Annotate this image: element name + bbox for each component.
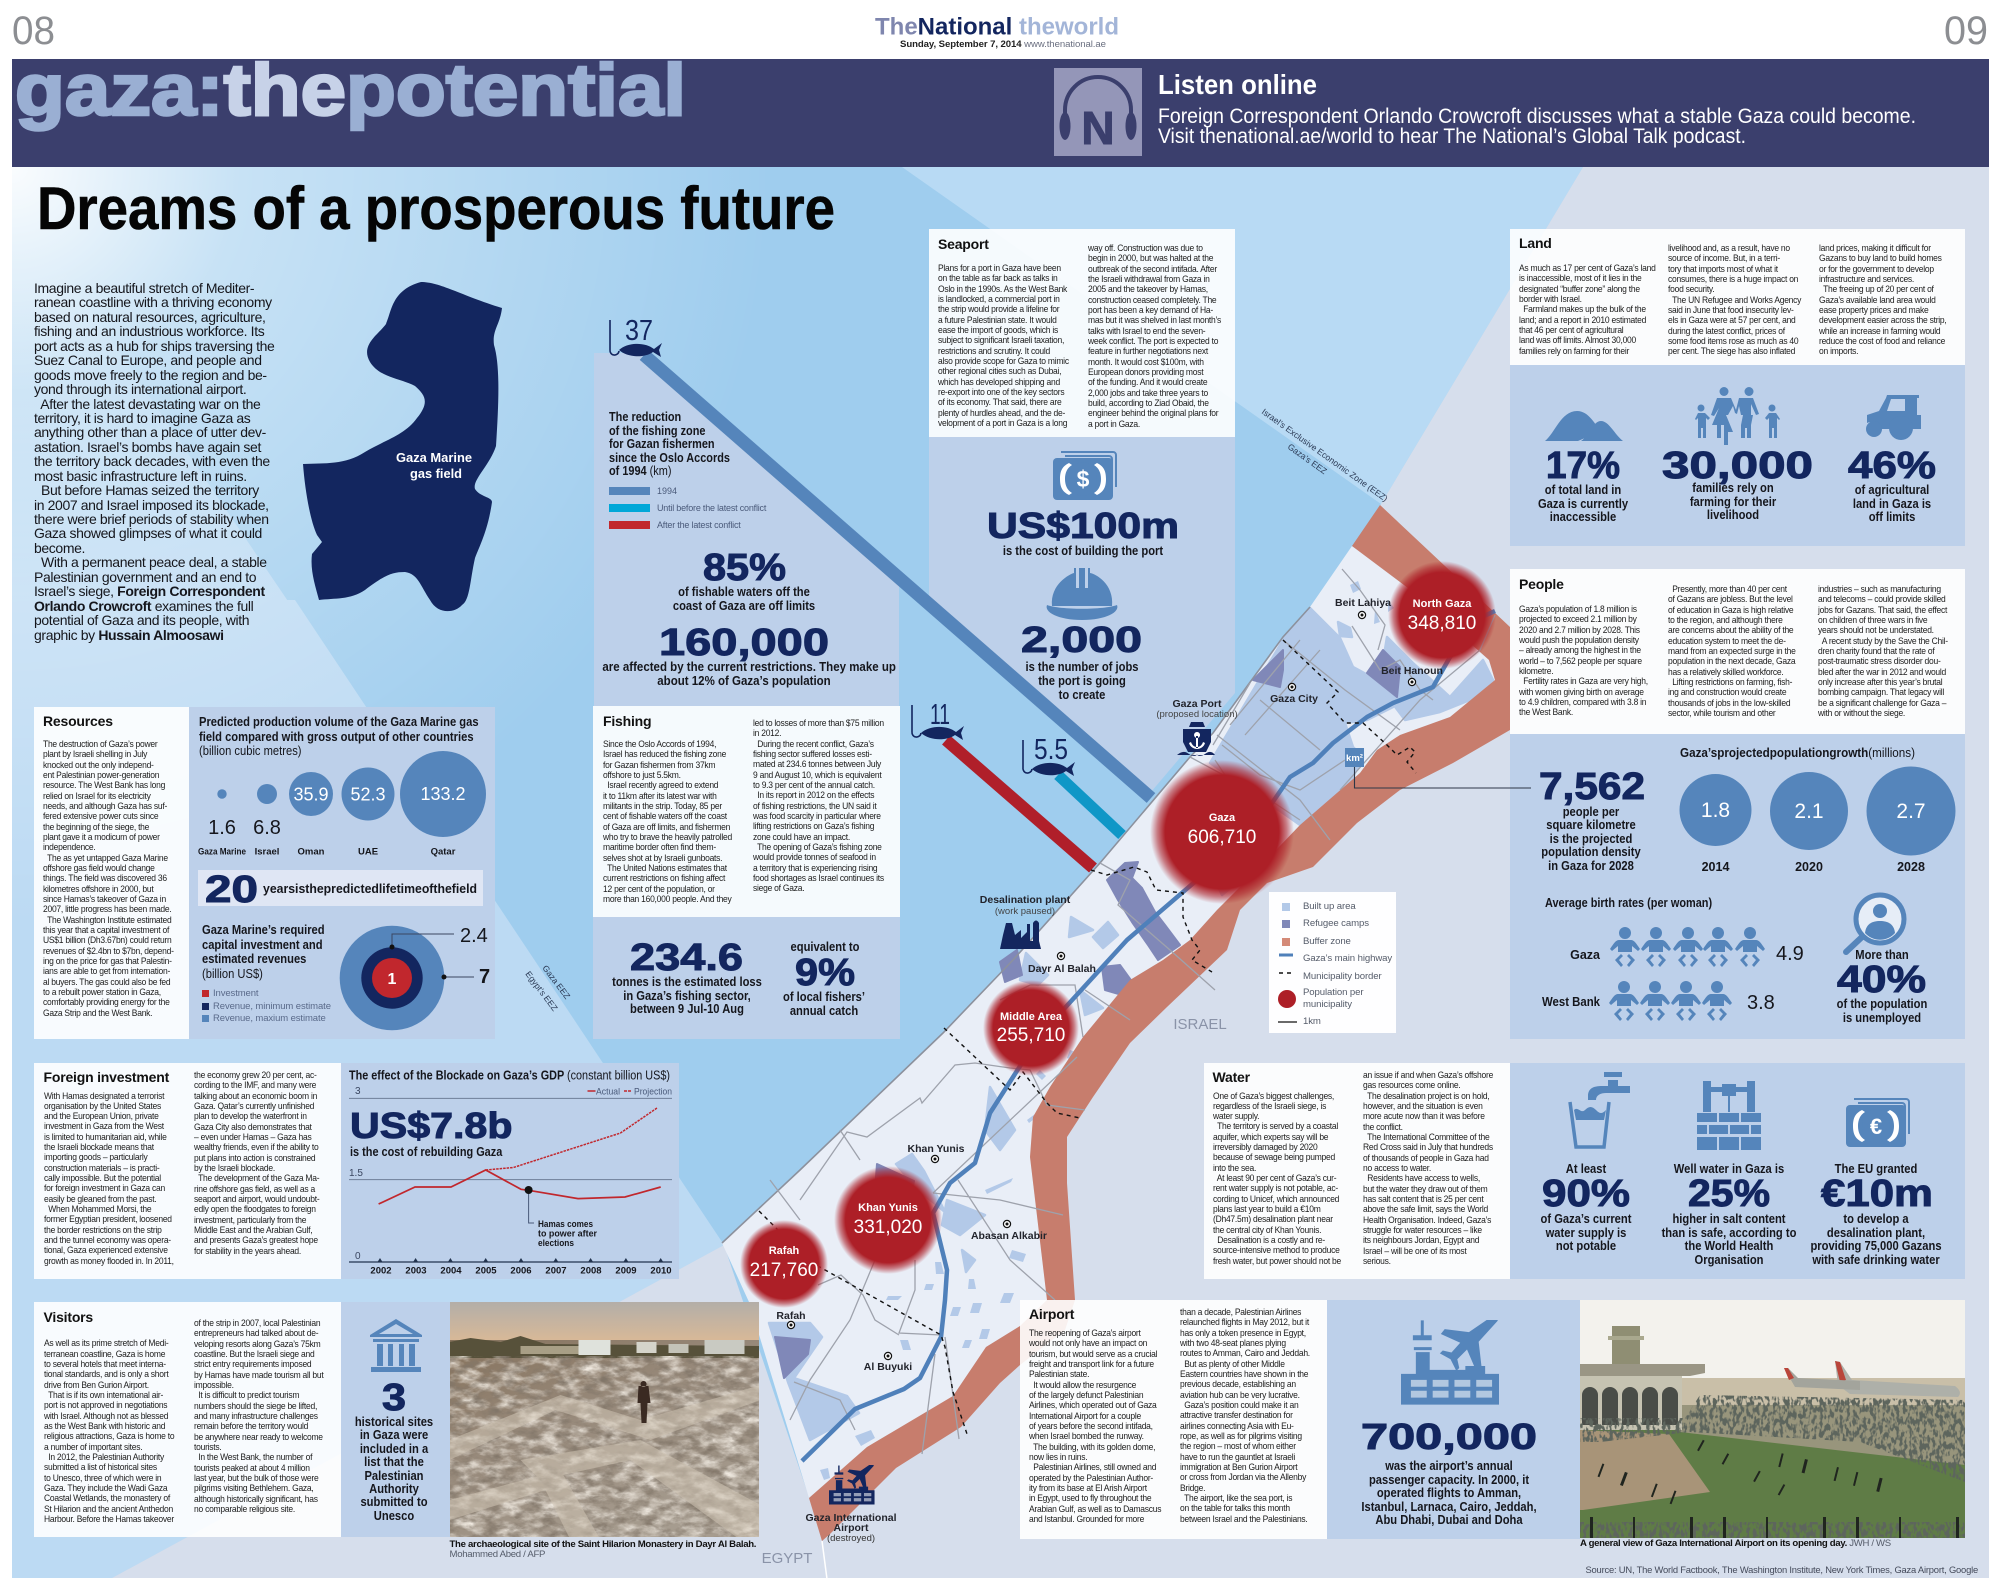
folio number right: 09	[1944, 9, 1988, 53]
population labels: 348,810	[1408, 613, 1476, 634]
concentric circle chart	[340, 925, 490, 1030]
panel: airport	[1020, 1300, 1580, 1539]
chart legend: Actual	[596, 1086, 620, 1098]
stat: 700,000: 700,000	[1361, 1416, 1537, 1457]
bubble chart: gas production: Gaza Marine	[198, 846, 246, 858]
legend labels: Gaza’s main highway	[1303, 953, 1392, 964]
axis labels: 3	[355, 1086, 361, 1097]
coastline	[722, 607, 1310, 1243]
stat label: affected people: are affected by the current restrictions. They make up about 12% of Gaza’s population	[602, 659, 896, 688]
main highway	[802, 611, 1495, 1461]
panel: fishing	[593, 706, 900, 1039]
legend labels: Built up area	[1303, 901, 1356, 912]
legend labels: Buffer zone	[1303, 936, 1351, 947]
banner	[12, 59, 1989, 167]
text block: intro: Imagine a beautiful stretch of Mediter- ranean coastline with a thriving economy based on natural resources, agriculture, fishing and an industrious workforce. Its port acts as a hub for ships traversing the Suez Canal to Europe, and people and goods move freely to the region and be- yond through its international airport. After the latest devastating war on the territory, it is hard to imagine Gaza as anything other than a place of utter dev- astation. Israel’s bombs have again set the territory back decades, with even the most basic infrastructure left in ruins. But before Hamas seized the territory in 2007 and Israel imposed its blockade, there were brief periods of stability when Gaza showed glimpses of what it could become. With a permanent peace deal, a stable Palestinian government and an end to Israel’s siege, Foreign Correspondent Orlando Crowcroft examines the full potential of Gaza and its people, with graphic by Hussain Almoosawi	[34, 280, 274, 642]
place names: ISRAEL	[1173, 1016, 1227, 1033]
bubble chart: gas production: Israel	[255, 846, 279, 858]
people text background	[1510, 569, 1965, 734]
stat label: desalination: to develop a desalination plant, providing 75,000 Gazans with safe drinking water	[1810, 1211, 1942, 1266]
panel: visitors	[34, 1302, 450, 1537]
icon: mountains	[1545, 411, 1623, 441]
masthead logo: TheNational theworld	[875, 14, 1119, 40]
line chart: GDP: 2007	[545, 1266, 567, 1276]
bubble chart: population growth: 2.7	[1896, 800, 1926, 823]
icon: banknotes	[1053, 451, 1117, 500]
place names: Al Buyuki	[864, 1361, 912, 1373]
heading: seaport: Seaport	[938, 236, 989, 252]
chart legend	[588, 1086, 672, 1098]
bubble chart: gas production: 1.6	[208, 817, 236, 839]
EEZ labels	[523, 406, 1390, 1013]
gridlines	[349, 1098, 672, 1180]
photo: Gaza International Airport	[1580, 1300, 1965, 1538]
icon: ship at Gaza Port	[1177, 722, 1215, 756]
stat: 17 percent: 17%	[1546, 445, 1620, 487]
place names: EGYPT	[762, 1550, 812, 1567]
stat: US$100m: US$100m	[987, 505, 1179, 546]
foreign investment text background	[34, 1063, 341, 1279]
map: Gaza Marine gas field	[303, 282, 502, 612]
listen online text: Visit thenational.ae/world to hear The National’s Global Talk podcast.	[1158, 124, 1746, 148]
stat label: EU granted: The EU granted	[1835, 1161, 1917, 1176]
stat: 46 percent: 46%	[1848, 445, 1936, 487]
axis labels: 1.5	[349, 1168, 363, 1179]
axis labels	[349, 1086, 363, 1262]
pictogram: birth rates	[1540, 920, 1810, 1028]
water text column 2: an issue if and when Gaza’s offshore gas resources come online. The desalination project is on hold, however, and the situation is even more acute now than it was before the conflict. The International Committee of the Red Cross said in July that hundreds of thousands of people in Gaza had no access to water. Residents have access to wells, but the water they draw out of them has salt content that is 25 per cent above the safe limit, says the World Health Organisation. Indeed, Gaza’s struggle for water resources – like its neighbours Jordan, Egypt and Israel – will be one of its most serious.	[1363, 1070, 1493, 1266]
bubble chart: gas production	[198, 751, 486, 858]
stat label: not potable: of Gaza’s current water supply is not potable	[1541, 1211, 1631, 1253]
municipality borders	[759, 640, 1416, 1434]
buffer zone	[809, 505, 1510, 1541]
heading: visitors: Visitors	[44, 1309, 93, 1325]
stat label: cost of the port: is the cost of building the port	[1003, 543, 1163, 558]
banner title: gaza the potential: gaza: thepotential	[15, 50, 686, 131]
place markers	[787, 611, 1416, 1360]
concentric circle chart: 7	[479, 966, 490, 988]
built up areas	[769, 608, 1493, 1440]
heading: airport: Airport	[1029, 1306, 1074, 1322]
stat label: fishable waters: of fishable waters off the coast of Gaza are off limits	[673, 584, 815, 612]
map: Gaza Marine gas field: gas field	[410, 467, 462, 481]
legend: investment: Revenue, minimum estimate	[213, 1001, 331, 1012]
pictogram: birth rates: 3.8	[1747, 992, 1775, 1014]
bubble chart: population growth	[1679, 765, 1959, 875]
airport text column 1: The reopening of Gaza’s airport would not only have an impact on tourism, but would serve as a crucial freight and transport link for a future Palestinian state. It would allow the resurgence of the largely defunct Palestinian Airlines, which operated out of Gaza International Airport for a couple of years before the second intifada, when Israel bombed the runway. The building, with its golden dome, now lies in ruins. Palestinian Airlines, still owned and operated by the Palestinian Author- ity from its base at El Arish Airport in Egypt, used to fly throughout the Arabian Gulf, as well as to Damascus and Istanbul. Grounded for more	[1029, 1328, 1161, 1524]
line chart: GDP	[341, 1063, 679, 1279]
band: 11 km	[946, 740, 1093, 868]
icon: desalination plant	[1000, 920, 1041, 949]
legend: fishing zone	[609, 486, 766, 530]
panel: people	[1510, 569, 1965, 1039]
chart legend: Projection	[634, 1086, 672, 1098]
legend labels: municipality	[1303, 999, 1352, 1010]
caption: airport photo: A general view of Gaza International Airport on its opening day. JWH / WS	[1580, 1538, 1891, 1549]
icon: euro banknotes	[1846, 1097, 1916, 1147]
Egypt border line	[822, 1541, 827, 1579]
callout: km squared connector to density stat: km²	[1346, 753, 1363, 764]
pictogram: birth rates: Gaza	[1570, 948, 1601, 962]
place names	[762, 597, 1443, 1567]
line chart: GDP: 2005	[475, 1266, 497, 1276]
heading: land: Land	[1519, 235, 1552, 251]
chart heading: birth rates: Average birth rates (per woman)	[1545, 895, 1712, 910]
bubble chart: gas production: UAE	[358, 846, 378, 858]
stat: 9 percent: 9%	[795, 952, 855, 994]
pictogram: birth rates: West Bank	[1542, 995, 1600, 1009]
listen online heading: Listen online	[1158, 69, 1317, 100]
stat label: jobs: is the number of jobs the port is going to create	[1025, 659, 1139, 702]
stat: 25 percent: 25%	[1688, 1173, 1770, 1215]
heading: foreign investment: Foreign investment	[44, 1069, 169, 1085]
place names: (work paused)	[995, 906, 1055, 917]
stat label: agricultural land: of agricultural land in Gaza is off limits	[1853, 482, 1931, 524]
legend swatches	[1275, 895, 1299, 1030]
chart heading: population growth: Gaza’sprojectedpopulationgrowth(millions)	[1680, 745, 1915, 760]
icon: tap and glass	[1568, 1072, 1632, 1149]
people text column 2: Presently, more than 40 per cent of Gazans are jobless. But the level of education in Gaza is high relative to the region, and although there are concerns about the ability of the education system to meet the de- mand from an expected surge in the population in the next decade, Gaza has a relatively skilled workforce. Lifting restrictions on farming, fish- ing and construction would create thousands of jobs in the low-skilled sector, while tourism and other	[1668, 584, 1796, 718]
place names: Beit Hanoun	[1381, 665, 1443, 677]
resources chart background	[189, 707, 495, 1039]
resources text background	[34, 707, 189, 1039]
place names: Gaza City	[1270, 693, 1318, 705]
panel: resources	[34, 707, 495, 1039]
icon: hook and fish 37: 37	[625, 315, 653, 347]
fishing text background	[593, 706, 900, 917]
panel: seaport	[929, 229, 1235, 702]
seaport text background	[929, 229, 1235, 437]
bubble chart: gas production: 52.3	[350, 784, 386, 804]
land text column 3: land prices, making it difficult for Gazans to buy land to build homes or for the government to develop infrastructure and services. The freeing up of 20 per cent of Gaza’s available land area would ease property prices and make development easier across the strip, while an increase in farming would reduce the cost of food and reliance on imports.	[1819, 243, 1947, 356]
stat label: unemployed: of the population is unemployed	[1837, 996, 1927, 1024]
icon: well	[1697, 1079, 1762, 1151]
chart title: The effect of the Blockade on Gaza’s GDP (constant billion US$)	[349, 1068, 670, 1082]
visitors text column 1: As well as its prime stretch of Medi- terranean coastline, Gaza is home to several hotels that meet interna- tional standards, and is only a short drive from Ben Gurion Airport. That is if its own international air- port is not approved in negotiations with Israel. Although not as blessed as the West Bank with historic and religious attractions, Gaza is home to a number of important sites. In 2012, the Palestinian Authority submitted a list of historical sites to Unesco, three of which were in Gaza. They include the Wadi Gaza Coastal Wetlands, the monastery of St Hilarion and the ancient Anthedon Harbour. Before the Hamas takeover	[44, 1338, 174, 1524]
stat label: cost of rebuilding: is the cost of rebuilding Gaza	[350, 1144, 502, 1159]
icon: hook and fish 11: 11	[930, 699, 950, 731]
source line: Source: UN, The World Factbook, The Washington Institute, New York Times, Gaza Airport, Google	[1585, 1564, 1978, 1575]
stat: 3: 3	[382, 1377, 406, 1419]
band: 5.5 km	[1058, 775, 1122, 835]
icon: banknotes: $	[1077, 466, 1090, 492]
airport stat background	[1326, 1300, 1580, 1539]
legend: investment: Investment	[213, 988, 258, 999]
foreign investment text column 2: the economy grew 20 per cent, ac- cording to the IMF, and many were talking about an economic boom in Gaza. Qatar’s currently unfinished plan to develop the waterfront in Gaza City also demonstrates that – even under Hamas – Gaza has wealthy friends, even if the ability to put plans into action is constrained by the Israeli blockade. The development of the Gaza Ma- rine offshore gas field, as well as a seaport and airport, would undoubt- edly open the floodgates to foreign investment, particularly from the Middle East and the Arabian Gulf, and presents Gaza’s greatest hope for stability in the years ahead.	[194, 1070, 319, 1256]
heading: people: People	[1519, 576, 1564, 592]
panel: fishing zone reduction	[602, 409, 896, 688]
stat: 20: 20	[205, 869, 258, 911]
stat label: lifetime of the field: yearsisthepredictedlifetimeofthefield	[263, 881, 477, 896]
heading: fishing: Fishing	[603, 713, 651, 729]
icon: hook and fish 11	[912, 699, 964, 740]
stat label: salt content: higher in salt content than is safe, according to the World Health Organisation	[1662, 1211, 1796, 1266]
population labels: Khan Yunis	[858, 1202, 918, 1214]
callout: km squared connector to density stat	[1345, 748, 1535, 790]
visitors text background	[34, 1302, 341, 1537]
bubble chart: gas production: Oman	[298, 846, 325, 858]
fishing text column 2: led to losses of more than $75 million in 2012. During the recent conflict, Gaza’s fishing sector suffered losses esti- mated at 234.6 tonnes between July 9 and August 10, which is equivalent to 9.3 per cent of the annual catch. In its report in 2012 on the effects of fishing restrictions, the UN said it was food scarcity in particular where lifting restrictions on Gaza’s fishing zone could have an impact. The opening of Gaza’s fishing zone would provide tonnes of seafood in a territory that is experiencing rising food shortages as Israel continues its siege of Gaza.	[753, 718, 884, 893]
stat: 30,000: 30,000	[1662, 445, 1813, 487]
airport text column 2: than a decade, Palestinian Airlines relaunched flights in May 2012, but it has only a token presence in Egypt, with two 48-seat planes plying routes to Amman, Cairo and Jeddah. But as plenty of other Middle Eastern countries have shown in the previous decade, establishing an aviation hub can be very lucrative. Gaza’s position could make it an attractive transfer destination for airlines connecting Asia with Eu- rope, as well as for pilgrims visiting the region – most of whom either have to run the gauntlet at Israeli immigration at Ben Gurion Airport or cross from Jordan via the Allenby Bridge. The airport, like the sea port, is on the table for talks this month between Israel and the Palestinians.	[1180, 1307, 1310, 1524]
projection line	[486, 1108, 657, 1170]
airport text background	[1020, 1300, 1326, 1539]
population circles	[740, 561, 1496, 1308]
EEZ labels: Gaza’s EEZ	[1286, 441, 1329, 476]
place names: Abasan Alkabir	[971, 1230, 1047, 1242]
place names: (proposed location)	[1156, 709, 1238, 720]
folio number left: 08	[12, 9, 55, 53]
place marker centres	[790, 614, 1414, 1358]
Gaza Strip land	[722, 546, 1495, 1498]
population labels: 331,020	[854, 1217, 922, 1238]
stat: 160,000: 160,000	[659, 622, 829, 664]
stat label: estimated loss: tonnes is the estimated loss in Gaza’s fishing sector, between 9 Jul-10 Aug	[612, 974, 762, 1016]
dateline: Sunday, September 7, 2014 www.thenational.ae	[900, 39, 1106, 50]
actual line	[379, 1170, 661, 1204]
population labels: North Gaza	[1413, 598, 1472, 610]
bubble chart: population growth: 2028	[1897, 860, 1925, 874]
bubble chart: population growth: 1.8	[1701, 799, 1730, 822]
population labels	[750, 598, 1476, 1281]
roads	[770, 569, 1495, 1454]
EEZ labels: Gaza EEZ	[540, 963, 572, 1001]
foreign investment text column 1: With Hamas designated a terrorist organisation by the United States and the European Union, private investment in Gaza from the West is limited to humanitarian aid, while the Israeli blockade means that importing goods – particularly construction materials – is practi- cally impossible. But the potential for foreign investment in Gaza can easily be gleaned from the past. When Mohammed Morsi, the former Egyptian president, loosened the border restrictions on the strip and the tunnel economy was opera- tional, Gaza experienced extensive growth as money flooded in. In 2011,	[44, 1090, 173, 1266]
bubble chart: population growth: 2014	[1702, 860, 1729, 874]
stat: 90 percent: 90%	[1542, 1173, 1630, 1215]
seaport text column 1: Plans for a port in Gaza have been on the table as far back as talks in Oslo in the 1990s. As the West Bank is landlocked, a commercial port in the strip would provide a lifeline for a future Palestinian state. It would ease the import of goods, which is subject to significant Israeli taxation, restrictions and scrutiny. It could also provide scope for Gaza to mimic other regional cities such as Dubai, which has developed shipping and re-export into one of the key sectors of its economy. That said, there are plenty of hurdles ahead, and the de- velopment of a port in Gaza is a long	[938, 263, 1069, 428]
headline: Dreams of a prosperous future	[37, 175, 835, 242]
stat label: families: families rely on farming for their livelihood	[1690, 480, 1776, 522]
bubble chart: gas production: Qatar	[431, 846, 456, 858]
visitors text column 2: of the strip in 2007, local Palestinian entrepreneurs had talked about de- veloping resorts along Gaza’s 75km coastline. But the Israeli siege and strict entry requirements imposed by Hamas have made tourism all but impossible. It is difficult to predict tourism numbers should the siege be lifted, and many infrastructure challenges remain before the territory would be anywhere near ready to welcome tourists. In the West Bank, the number of tourists peaked at about 4 million last year, but the bulk of those were pilgrims visiting Bethlehem. Gaza, although historically significant, has no comparable religious site.	[194, 1318, 323, 1514]
place names: Dayr Al Balah	[1028, 963, 1096, 975]
stat: 40 percent: 40%	[1837, 959, 1926, 1001]
stat label: well water: Well water in Gaza is	[1674, 1161, 1784, 1176]
line chart: GDP: 2004	[440, 1266, 462, 1276]
legend labels: Municipality border	[1303, 971, 1382, 982]
header: folios and masthead	[12, 9, 1988, 53]
bubble chart: population growth: 2.1	[1794, 800, 1824, 823]
population labels: 255,710	[997, 1025, 1065, 1046]
land text column 2: livelihood and, as a result, have no source of income. But, in a terri- tory that imports most of what it consumes, there is a huge impact on food security. The UN Refugee and Works Agency said in June that food insecurity lev- els in Gaza were at 57 per cent, and during the latest conflict, prices of some food items rose as much as 40 per cent. The siege has also inflated	[1668, 243, 1801, 356]
population labels: 606,710	[1188, 827, 1256, 848]
listen online text: Foreign Correspondent Orlando Crowcroft discusses what a stable Gaza could become.	[1158, 104, 1916, 128]
icon: magnifying glass with person	[1840, 890, 1910, 956]
resources text: The destruction of Gaza’s power plant by Israeli shelling in July knocked out the only independ- ent Palestinian power-generation resource. The West Bank has long relied on Israel for its electricity needs, and although Gaza has suf- fered extensive power cuts since the beginning of the siege, the plant gave it a modicum of power independence. The as yet untapped Gaza Marine offshore gas field would change things. The field was discovered 36 kilometres offshore in 2000, but since Hamas’s takeover of Gaza in 2007, little progress has been made. The Washington Institute estimated this year that a capital investment of US$1 billion (Dh3.67bn) could return revenues of $2.4bn to $7bn, depend- ing on the price for gas that Palestin- ians are able to get from internation- al buyers. The gas could also be fed to a rebuilt power station in Gaza, comfortably providing energy for the Gaza Strip and the West Bank.	[43, 739, 174, 1018]
legend: investment: Revenue, maxium estimate	[213, 1013, 326, 1024]
x axis ticks and years	[378, 1258, 663, 1262]
legend: investment	[202, 988, 331, 1024]
stat label: equivalent to: equivalent to	[791, 939, 859, 954]
water text background	[1204, 1063, 1510, 1279]
legend labels: 1km	[1303, 1016, 1321, 1027]
chart heading: predicted production: Predicted production volume of the Gaza Marine gas field compared with gross output of other countries (billion cubic metres)	[199, 714, 479, 758]
callout: 20 years	[198, 870, 483, 906]
stat: 234.6: 234.6	[630, 937, 743, 979]
heading: resources: Resources	[43, 713, 113, 729]
panel: water	[1204, 1063, 1965, 1279]
stat label: historical sites: historical sites in Gaza were included in a list that the Palestinian Authority submitted to Unesco	[355, 1414, 433, 1523]
legend: fishing zone: 1994	[657, 486, 677, 496]
pictogram: birth rates: 4.9	[1776, 943, 1804, 965]
icon: airport tower and plane	[1401, 1320, 1500, 1405]
EEZ labels: Israel’s Exclusive Economic Zone (EEZ)	[1260, 406, 1390, 504]
land stats background	[1510, 365, 1965, 546]
EEZ labels: Egypt’s EEZ	[523, 969, 560, 1013]
icon: euro banknotes: €	[1870, 1114, 1882, 1139]
population labels: Rafah	[769, 1245, 800, 1257]
photo: archaeological site of Saint Hilarion	[450, 1302, 759, 1537]
land text column 1: As much as 17 per cent of Gaza’s land is inaccessible, most of it lies in the designated “buffer zone” along the border with Israel. Farmland makes up the bulk of the land; and a report in 2010 estimated that 46 per cent of agricultural land was off limits. Almost 30,000 families rely on farming for their	[1519, 263, 1656, 356]
water stats background	[1510, 1063, 1965, 1279]
line chart: GDP: Hamas comes	[538, 1219, 593, 1230]
legend labels: Refugee camps	[1303, 918, 1369, 929]
scattered built up blocks	[820, 581, 1394, 1480]
icon: family	[1695, 387, 1780, 445]
line chart: GDP: 2003	[405, 1266, 427, 1276]
bubble chart: gas production: 133.2	[420, 784, 466, 804]
panel: map legend	[1269, 892, 1396, 1033]
label: Gaza Marine gas field: Gaza Marine	[396, 451, 472, 465]
stat: 2,000: 2,000	[1021, 619, 1142, 660]
icon: temple	[370, 1319, 422, 1372]
stat label: more than: More than	[1855, 947, 1909, 962]
line chart: GDP: 2002	[370, 1266, 392, 1276]
icon: tractor	[1866, 395, 1921, 440]
fishing zone panel background	[594, 353, 899, 706]
icon: hook and fish 5.5	[1023, 734, 1075, 776]
fishing stats background	[593, 917, 900, 1039]
seaport stats panel background	[929, 437, 1235, 792]
line chart: GDP: 2010	[650, 1266, 672, 1276]
place names: Khan Yunis	[908, 1143, 965, 1155]
icon: headphones podcast	[1054, 68, 1142, 156]
panel: land	[1510, 229, 1965, 546]
stat label: at least: At least	[1566, 1161, 1606, 1176]
concentric circle chart: 1	[388, 971, 397, 988]
icon: airport on map	[829, 1464, 875, 1505]
stat: 7,562: 7,562	[1539, 766, 1645, 808]
population labels: Middle Area	[1000, 1011, 1063, 1023]
legend labels: Population per	[1303, 987, 1363, 998]
bubble chart: population growth: 2020	[1795, 860, 1823, 874]
stat label: inaccessible: of total land in Gaza is currently inaccessible	[1538, 482, 1628, 524]
legend labels	[1303, 900, 1393, 1030]
visitors stat background	[341, 1302, 450, 1537]
place names: Gaza Port	[1172, 698, 1222, 710]
people text column 3: industries – such as manufacturing and telecoms – could provide skilled jobs for Gazans. That said, the effect on children of three wars in five years should not be understated. A recent study by the Save the Chil- dren charity found that the rate of post-traumatic stress disorder dou- bled after the war in 2012 and would only increase after this year’s brutal bombing campaign. That legacy will be a significant challenge for Gaza – with or without the siege.	[1818, 584, 1948, 718]
stat: 85 percent: 85%	[703, 547, 786, 589]
legend: fishing zone: After the latest conflict	[657, 520, 741, 530]
place names: Gaza International	[805, 1512, 897, 1524]
stat: US$7.8b: US$7.8b	[350, 1105, 512, 1146]
heading: water: Water	[1212, 1069, 1250, 1085]
stat label: population density: people per square kilometre is the projected population density in Gaza for 2028	[1541, 804, 1641, 873]
heading: the reduction of the fishing zone: The reduction of the fishing zone for Gazan fishermen since the Oslo Accords of 1994 (km)	[609, 409, 730, 478]
bubble chart: gas production: 6.8	[253, 817, 281, 839]
people text column 1: Gaza’s population of 1.8 million is projected to exceed 2.1 million by 2020 and 2.7 million by 2028. This would push the population density – already among the highest in the world – to 7,562 people per square kilometre. Fertility rates in Gaza are very high, with women giving birth on average to 4.9 children, compared with 3.8 in the West Bank.	[1519, 604, 1648, 717]
water text column 1: One of Gaza’s biggest challenges, regardless of the Israeli siege, is water supply. The territory is served by a coastal aquifer, which experts say will be irreversibly damaged by 2020 because of sewage being pumped into the sea. At least 90 per cent of Gaza’s cur- rent water supply is not potable, ac- cording to Unicef, which announced plans last year to build a €10m (Dh47.5m) desalination plant near the central city of Khan Younis. Desalination is a costly and re- source-intensive method to produce fresh water, but power should not be	[1212, 1090, 1341, 1266]
place names: Airport	[834, 1522, 869, 1534]
legend: fishing zone: Until before the latest conflict	[657, 503, 766, 513]
population labels: Gaza	[1209, 812, 1236, 824]
line chart: GDP: 2009	[615, 1266, 637, 1276]
axis labels: 0	[355, 1251, 361, 1262]
stat: 10 million euro: €10m	[1821, 1173, 1933, 1215]
line chart: GDP: to power after	[538, 1228, 597, 1240]
caption: archaeological site: The archaeological site of the Saint Hilarion Monastery in Dayr Al Balah. Mohammed Abed / AFP	[450, 1539, 756, 1560]
band: 37 km	[644, 355, 1151, 798]
panel: foreign investment	[34, 1063, 679, 1279]
population labels: 217,760	[750, 1260, 818, 1281]
line chart: GDP: elections	[538, 1238, 574, 1249]
icon: headphones podcast: N	[1081, 102, 1115, 154]
blockade chart background	[341, 1063, 679, 1279]
stat label: passenger capacity: was the airport’s annual passenger capacity. In 2000, it operated flights to Amman, Istanbul, Larnaca, Cairo, Jeddah, Abu Dhabi, Dubai and Doha	[1361, 1458, 1536, 1527]
annotation: Hamas	[529, 1190, 534, 1223]
land text background	[1510, 229, 1965, 365]
line chart: GDP: 2006	[510, 1266, 532, 1276]
seaport text column 2: way off. Construction was due to begin in 2000, but was halted at the outbreak of the second intifada. After the Israeli withdrawal from Gaza in 2005 and the takeover by Hamas, construction ceased completely. The port has been a key demand of Ha- mas but it was shelved in last month’s talks with Israel to end the seven- week conflict. The port is expected to feature in further negotiations next month. It would cost $100m, with European donors providing most of the funding. And it would create 2,000 jobs and take three years to build, according to Ziad Obaid, the engineer behind the original plans for a port in Gaza.	[1088, 243, 1221, 429]
chart heading: capital investment: Gaza Marine’s required capital investment and estimated revenues (billion US$)	[202, 922, 325, 980]
concentric circle chart: 2.4	[460, 925, 488, 947]
bubble chart: gas production: 35.9	[293, 784, 329, 804]
line chart: GDP: 2008	[580, 1266, 602, 1276]
place names: Desalination plant	[980, 894, 1071, 906]
fishing text column 1: Since the Oslo Accords of 1994, Israel has reduced the fishing zone for Gazan fishermen from 37km offshore to just 5.5km. Israel recently agreed to extend it to 11km after its latest war with militants in the strip. Today, 85 per cent of fishable waters off the coast of Gaza are off limits, and fishermen who try to brave the heavily patrolled maritime border often find them- selves shot at by Israeli gunboats. The United Nations estimates that current restrictions on fishing affect 12 per cent of the population, or more than 160,000 people. And they	[603, 739, 732, 904]
place names: Rafah	[776, 1310, 806, 1322]
listen online text	[1158, 104, 1916, 148]
place names: (destroyed)	[827, 1533, 875, 1544]
people stats background	[1510, 734, 1965, 1039]
icon: hard hat	[1046, 568, 1118, 620]
icon: hook and fish 5.5: 5.5	[1034, 734, 1068, 766]
place names: Beit Lahiya	[1335, 597, 1391, 609]
icon: hook and fish 37	[610, 315, 662, 357]
refugee camps	[775, 650, 1400, 1378]
stat label: annual catch: of local fishers’ annual catch	[783, 989, 865, 1018]
